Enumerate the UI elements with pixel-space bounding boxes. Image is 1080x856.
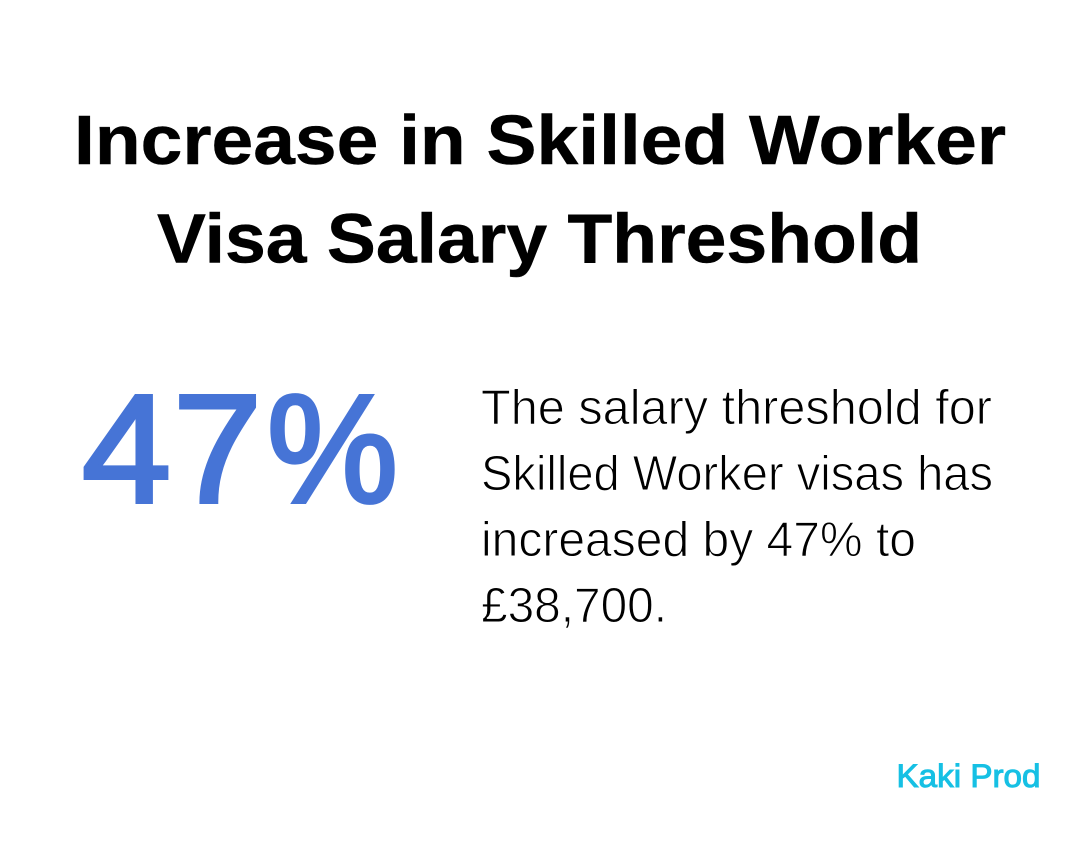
big statistic: 47%: % (267, 363, 398, 535)
description text: £38,700. (481, 579, 667, 633)
big statistic: 47%: 7 (173, 363, 262, 535)
description text (481, 381, 993, 633)
big statistic: 47% (82, 363, 398, 535)
title: Increase in Skilled Worker (74, 101, 1006, 179)
description text: Skilled Worker visas has (481, 447, 993, 501)
logo: Kaki Prod: Kaki Prod (896, 758, 1040, 794)
description text: The salary threshold for (481, 381, 992, 435)
title: Visa Salary Threshold (157, 200, 922, 278)
description text: increased by 47% to (481, 513, 916, 567)
big statistic: 47%: 4 (82, 363, 171, 535)
title (74, 101, 1006, 278)
